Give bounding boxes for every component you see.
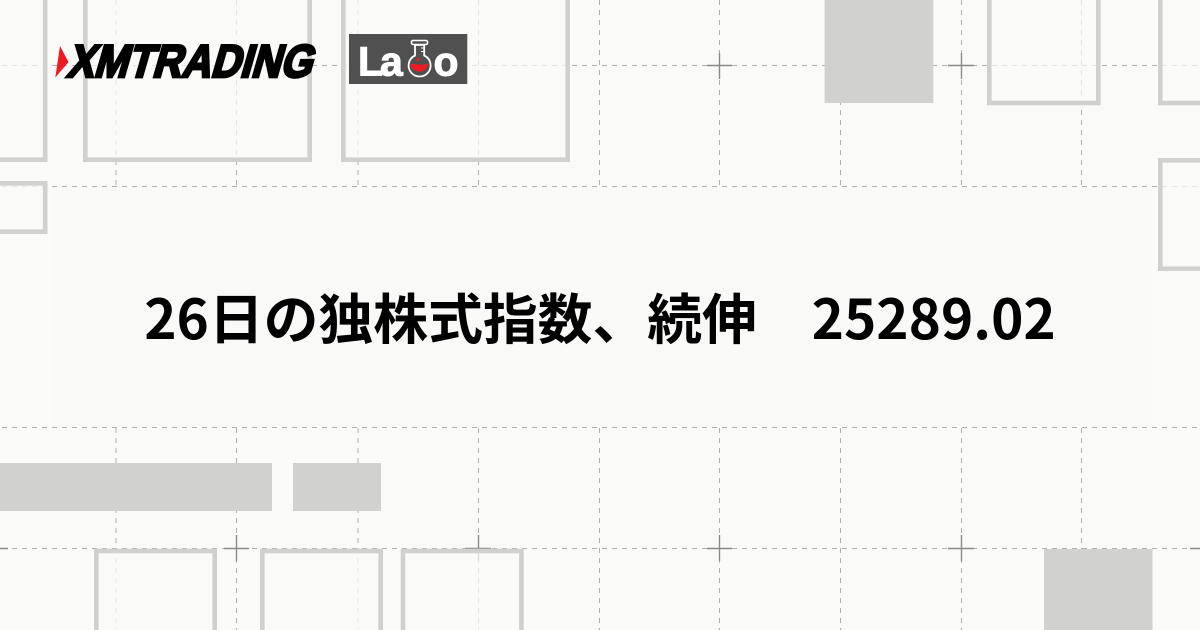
title: 26日の独株式指数、続伸 25289.02 [144, 275, 1056, 355]
logo: Lab flask: o [434, 38, 458, 84]
logo: Lab flask: L [358, 38, 383, 84]
logo: Lab flask [349, 34, 467, 84]
logo: XMTRADING: XMTRADING [63, 36, 323, 87]
icon: flask [409, 40, 431, 76]
logo: Lab flask: a [380, 38, 404, 84]
